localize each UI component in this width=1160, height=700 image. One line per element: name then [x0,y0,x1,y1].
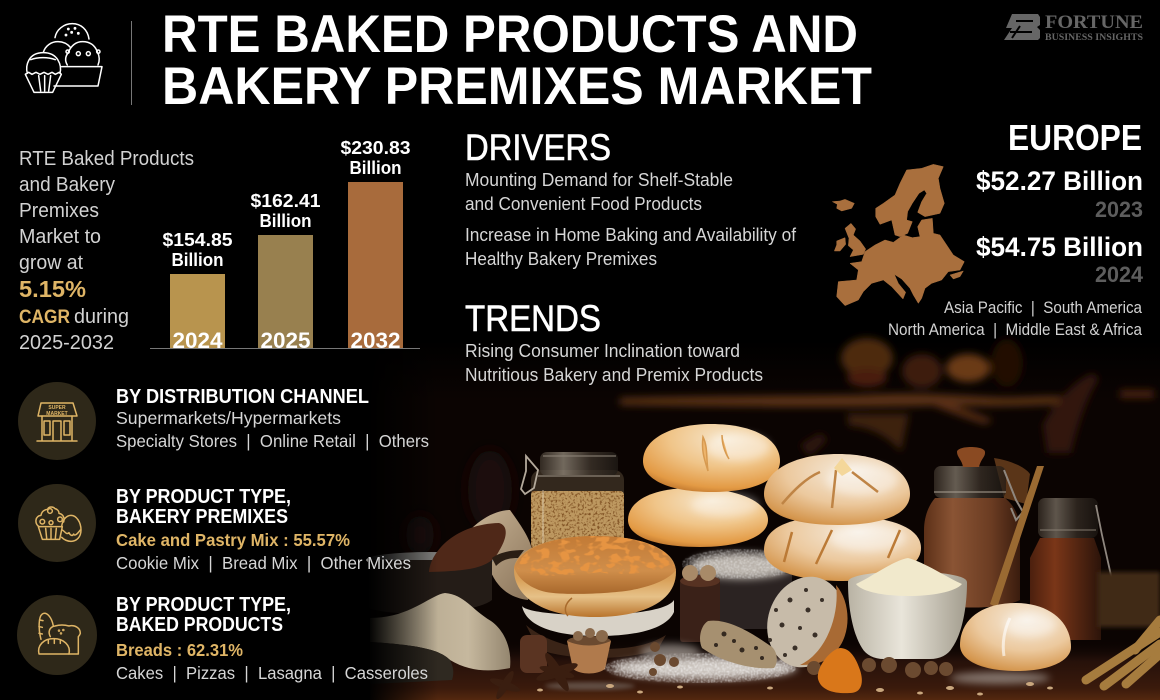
CAGR summary text: Premixes [19,200,99,222]
stacked buns centre [628,424,780,547]
segment: by product type, baked products: Cakes | Pizzas | Lasagna | Casseroles [116,663,428,683]
segment: by product type, bakery premixes: BY PRODUCT TYPE, [116,486,291,508]
brown jar [924,447,1023,608]
small bun bottom right [960,603,1071,671]
segment: by distribution channel: Supermarkets/Hypermarkets [116,408,341,428]
dried stems behind the left jar [406,450,512,555]
drivers: Increase in Home Baking and Availability of [465,225,797,245]
segment: by distribution channel [18,382,429,460]
logo: Fortune Business Insights [1004,12,1143,42]
icon: supermarket: MARKET [46,411,68,417]
icon: supermarket: SUPER [48,405,66,411]
CAGR summary text: 5.15% [19,276,86,302]
star anise [489,650,579,700]
title [162,5,872,116]
drivers [465,127,797,269]
map: Europe [832,164,964,306]
stacked buns right [764,454,921,581]
bar 2032: 2032 [350,328,400,353]
dark bowl and chocolate loaf left [366,523,524,614]
apricot [818,648,862,693]
segment: by product type, bakery premixes: BAKERY PREMIXES [116,506,288,528]
table surface [370,640,1160,700]
trends [465,298,763,385]
bar 2024: 2024 [172,328,223,353]
bar 2025: $162.41 [250,190,320,211]
trends: TRENDS [465,298,601,339]
left glass jar with grains [521,452,624,550]
header icon: baked goods [25,24,102,92]
bar 2032: $230.83 [340,137,410,158]
linen cloth lower left [370,593,510,684]
CAGR summary text: Market to [19,226,101,248]
topped bread [514,536,676,617]
white bowl under topped bread [522,600,674,658]
bar 2025: 2025 [260,328,310,353]
segment: by product type, bakery premixes: Cake and Pastry Mix : 55.57% [116,530,350,550]
bar 2025 [250,190,320,353]
burlap sack right [1098,572,1160,627]
segment: by product type, baked products: BAKED PRODUCTS [116,614,283,636]
CAGR summary text: during [74,306,129,328]
regional stats: Europe [888,117,1144,339]
small cookie [700,621,777,668]
small red spice jar [1030,498,1112,640]
blurred muffins and shelf [620,338,1154,457]
regional stats: Europe: EUROPE [1008,117,1142,158]
CAGR summary text: grow at [19,252,83,274]
icon: bread loaves [17,595,97,675]
speckled cookie [756,567,856,677]
trends: Nutritious Bakery and Premix Products [465,365,763,385]
flour bowl [848,558,967,659]
icon: muffin and egg [18,484,96,562]
header divider [131,21,132,105]
segment: by product type, baked products: BY PRODUCT TYPE, [116,594,291,616]
spilled flour [545,644,1050,690]
wooden spoon handle [990,466,1044,608]
fade to black [368,340,438,700]
CAGR summary text: and Bakery [19,174,115,196]
regional stats: Europe: $52.27 Billion [976,166,1143,196]
nuts row [649,642,953,678]
segment: by product type, bakery premixes: Cookie Mix | Bread Mix | Other Mixes [116,553,411,573]
regional stats: Europe: Asia Pacific | South America [944,299,1143,317]
bar 2024: Billion [172,249,224,270]
drivers: Healthy Bakery Premixes [465,249,657,269]
trends: Rising Consumer Inclination toward [465,341,740,361]
scattered grains [537,682,1053,696]
wooden paddle behind jars [994,458,1030,504]
drivers: and Convenient Food Products [465,194,702,214]
bar 2032: Billion [350,157,402,178]
floured pedestal with speckled flour [682,549,798,629]
regional stats: Europe: 2023 [1095,197,1143,222]
drivers: DRIVERS [465,127,611,168]
CAGR summary text: CAGR [19,307,70,328]
regional stats: Europe: 2024 [1095,262,1144,287]
logo: Fortune Business Insights: FORTUNE [1045,12,1143,33]
logo: Fortune Business Insights: BUSINESS INSIGHTS [1045,32,1143,42]
CAGR summary text: RTE Baked Products [19,148,194,170]
segment: by product type, baked products [17,594,428,683]
title: BAKERY PREMIXES MARKET [162,57,872,116]
segment: by distribution channel: BY DISTRIBUTION CHANNEL [116,386,369,408]
background photo: bakery still life [366,338,1160,700]
segment: by product type, baked products: Breads : 62.31% [116,640,243,660]
CAGR summary text: 2025-2032 [19,332,114,354]
segment: by distribution channel: Specialty Stores | Online Retail | Others [116,431,429,451]
bar 2024: $154.85 [162,229,232,250]
title: RTE BAKED PRODUCTS AND [162,5,858,64]
segment: by product type, bakery premixes [18,484,411,573]
drivers: Mounting Demand for Shelf-Stable [465,170,733,190]
CAGR summary text [19,148,194,354]
bar 2024 [162,229,232,353]
icon: supermarket [18,382,96,460]
bar 2032 [340,137,410,353]
regional stats: Europe: North America | Middle East & Africa [888,321,1143,339]
wheat stalks [1086,620,1160,686]
linen cloth upper left [460,510,532,600]
bar 2025: Billion [260,210,312,231]
bar chart: market size [150,137,420,353]
regional stats: Europe: $54.75 Billion [976,232,1143,262]
wooden pot with hazelnuts [520,565,720,674]
